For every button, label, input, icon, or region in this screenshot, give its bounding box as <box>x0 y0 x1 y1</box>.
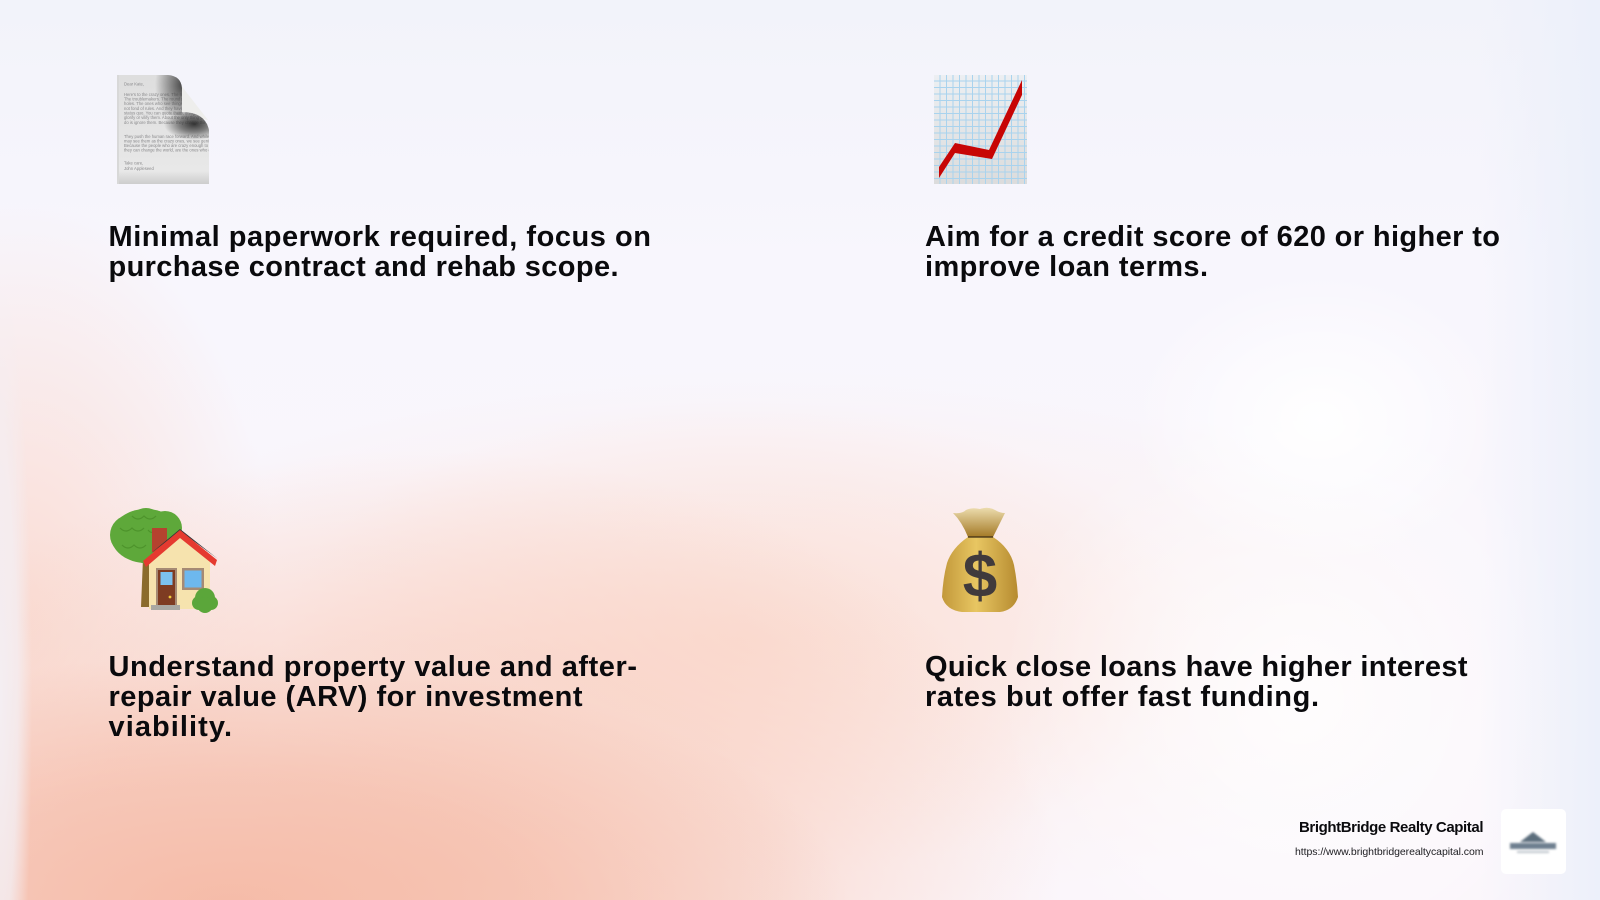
footer: brand <box>1295 809 1566 874</box>
icon: page with curl: Take care, <box>124 160 143 166</box>
heading: property value text: repair value (ARV) for investment <box>108 681 583 713</box>
heading: paperwork text <box>108 221 651 283</box>
icon: page with curl: they can change the world, are the ones who do. <box>124 148 214 152</box>
icon: page with curl: may see them as the crazy ones, we see genius. <box>124 138 215 144</box>
icon: page with curl: They push the human race forward. And while some <box>124 134 221 139</box>
panel: quick close loans <box>925 508 1468 713</box>
heading: paperwork text: Minimal paperwork required, focus on <box>108 221 651 253</box>
heading: quick close text <box>925 651 1468 713</box>
heading: quick close text: Quick close loans have higher interest <box>925 651 1468 683</box>
heading: credit score text: Aim for a credit score of 620 or higher to <box>925 221 1500 253</box>
panel: credit score <box>925 75 1500 283</box>
icon: page with curl: Dear Kate, <box>124 82 144 86</box>
icon: page with curl <box>117 75 209 184</box>
brand url: https://www.brightbridgerealtycapital.com <box>1295 846 1484 858</box>
panel: minimal paperwork <box>108 75 651 283</box>
icon: page with curl: holes. The ones who see things differently. <box>124 101 203 106</box>
icon: page with curl: status quo. You can quote them, disagree with them, <box>124 110 221 116</box>
icon: page with curl: John Appleseed <box>124 166 154 171</box>
heading: property value text: viability. <box>108 711 232 743</box>
icon: page with curl: do is ignore them. Because they change things. <box>124 120 212 125</box>
icon: chart with rising red line <box>934 75 1027 184</box>
heading: credit score text <box>925 221 1500 283</box>
heading: property value text: Understand property value and after- <box>108 651 637 683</box>
icon: page with curl: The troublemakers. The round pegs in <box>124 96 196 102</box>
icon: money bag <box>942 508 1018 612</box>
icon: page with curl: Here's to the crazy ones. The misfits. <box>124 92 193 97</box>
icon: page with curl: glorify or vilify them. About the only thing you can't <box>124 115 218 120</box>
icon: page with curl: Because the people who are crazy enough to think <box>124 143 219 148</box>
logo tile <box>1501 809 1566 874</box>
heading: paperwork text: purchase contract and rehab scope. <box>108 251 618 283</box>
icon: page with curl: not fond of rules. And they have no respect <box>124 106 204 111</box>
heading: property value text <box>108 651 637 743</box>
icon: money bag: $ <box>963 542 997 611</box>
heading: quick close text: rates but offer fast funding. <box>925 681 1319 713</box>
heading: credit score text: improve loan terms. <box>925 251 1208 283</box>
panel: property value <box>108 508 637 743</box>
brand name: BrightBridge Realty Capital <box>1299 819 1484 836</box>
icon: house with tree <box>110 508 218 613</box>
